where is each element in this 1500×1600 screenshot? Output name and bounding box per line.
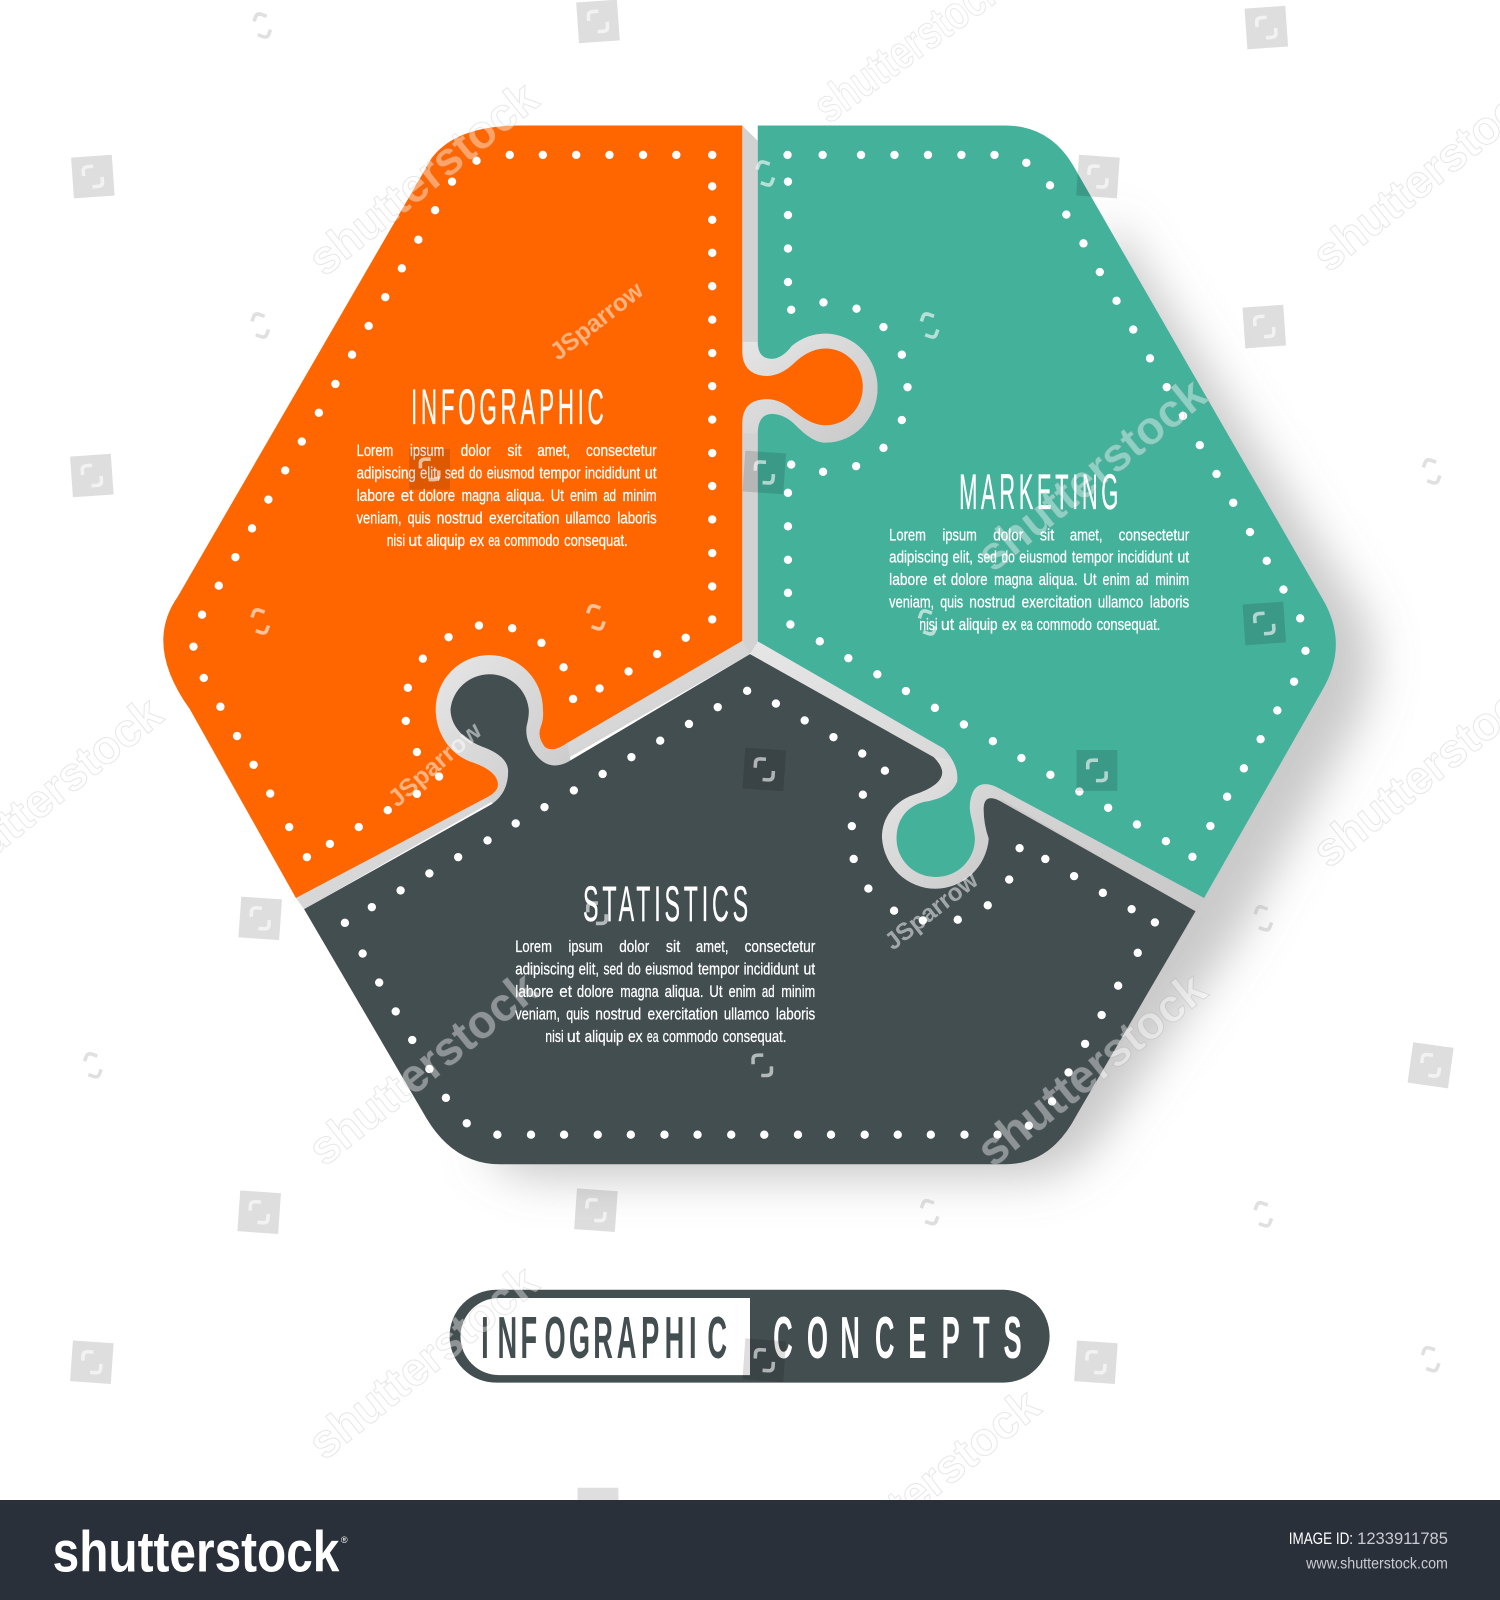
watermark: loose logo marks (81, 13, 1444, 1372)
text block: statistics body: dolor (619, 938, 650, 956)
text block: infographic body: magna (462, 487, 501, 505)
text block: infographic body: elit, (420, 465, 440, 483)
text block: infographic body: incididunt (585, 465, 640, 483)
text block: marketing body: consectetur (1119, 526, 1190, 544)
text block: marketing body: incididunt (1118, 549, 1173, 567)
text block: statistics body: veniam, (515, 1005, 560, 1023)
text block: marketing body: exercitation (1022, 594, 1092, 612)
text block: statistics body: ullamco (724, 1005, 769, 1023)
text block: infographic body: consequat. (564, 532, 628, 550)
text block: marketing body: nisi (919, 616, 938, 634)
watermark: shutterstock diagonal texts: shutterstock (800, 1378, 1050, 1592)
dotted stitching: teal (788, 155, 1306, 857)
text block: infographic body: dolor (461, 442, 491, 460)
watermark: shutterstock diagonal texts: shutterstock (298, 1254, 548, 1469)
text: INFOGRAPHIC (411, 379, 607, 435)
dotted stitching: orange (193, 155, 712, 857)
text block: statistics body: labore (515, 983, 553, 1001)
text block: marketing body: ipsum (943, 526, 977, 544)
text block: infographic body: nostrud (437, 509, 483, 527)
text block: statistics body: sit (666, 938, 681, 956)
text block: infographic body: enim (570, 487, 597, 505)
text block: infographic body: aliquip (426, 532, 465, 550)
text block: infographic body: nisi (387, 532, 405, 550)
watermark: shutterstock diagonal texts: shutterstock (967, 367, 1216, 581)
text: STATISTICS (583, 876, 752, 932)
text block: statistics body: adipiscing (515, 960, 574, 978)
text block: infographic body: Lorem (357, 442, 393, 460)
text block: infographic body: ut (645, 465, 657, 483)
puzzle gaps (296, 126, 1204, 911)
text block: marketing body: quis (940, 594, 963, 612)
text block: marketing body: tempor (1072, 549, 1114, 567)
text block: infographic body: laboris (617, 509, 657, 527)
text block: marketing body: et (933, 571, 946, 589)
text block: statistics body: Lorem (515, 938, 552, 956)
text block: infographic body: ad (603, 487, 616, 505)
text block: infographic body: ex (469, 532, 484, 550)
text block: statistics body: nisi (545, 1028, 564, 1046)
watermark: JSparrow credits (383, 276, 984, 956)
text block: infographic body: dolore (418, 487, 455, 505)
text block: marketing body: laboris (1150, 594, 1189, 612)
text block: marketing body: enim (1103, 571, 1130, 589)
text block: marketing body: do (1002, 549, 1015, 567)
text block: statistics body: consectetur (745, 938, 816, 956)
text block: marketing body (889, 526, 1190, 634)
text block: marketing body: ullamco (1098, 594, 1143, 612)
text block: marketing body: dolore (951, 571, 988, 589)
text block: marketing body: labore (889, 571, 927, 589)
text block: infographic body: sit (507, 442, 522, 460)
text block: infographic body: labore (357, 487, 395, 505)
text block: infographic body: ipsum (410, 442, 444, 460)
text block: infographic body: ut (408, 532, 422, 550)
text block: infographic body (357, 442, 657, 550)
text block: infographic body: veniam, (357, 509, 402, 527)
long drop shadow (480, 219, 1372, 1179)
text block: marketing body: aliquip (959, 616, 998, 634)
text block: marketing body: eiusmod (1019, 549, 1067, 567)
text block: marketing body: sed (977, 549, 997, 567)
text block: infographic body: exercitation (489, 509, 559, 527)
text block: marketing body: elit, (953, 549, 973, 567)
text block: marketing body: ea (1021, 616, 1033, 634)
text block: infographic body: commodo (504, 532, 559, 550)
text block: statistics body: dolore (577, 983, 614, 1001)
text block: statistics body: enim (729, 983, 756, 1001)
text block: infographic body: aliqua. (506, 487, 545, 505)
bottom pill: infographic concepts (450, 1290, 1050, 1383)
text block: marketing body: adipiscing (889, 549, 948, 567)
text block: statistics body: consequat. (723, 1028, 786, 1046)
text block: marketing body: veniam, (889, 594, 934, 612)
footer bar: shutterstock (53, 1520, 340, 1584)
watermark: JSparrow credits: JSparrow (880, 866, 984, 956)
panel: teal marketing piece (758, 126, 1336, 898)
text block: statistics body: aliqua. (665, 983, 704, 1001)
dotted stitching: dark (345, 691, 1155, 1135)
watermark: shutterstock diagonal texts: shutterstock (967, 962, 1216, 1176)
text block: infographic body: ullamco (565, 509, 611, 527)
text block: statistics body: eiusmod (645, 960, 693, 978)
text block: marketing body: nostrud (969, 594, 1015, 612)
text block: statistics body: ad (762, 983, 775, 1001)
text block: infographic body: tempor (539, 465, 581, 483)
watermark: shutterstock diagonal texts: shutterstock (298, 71, 548, 285)
text block: marketing body: Lorem (889, 526, 926, 544)
text block: statistics body: et (559, 983, 572, 1001)
text block: statistics body: exercitation (648, 1005, 718, 1023)
bottom pill: infographic concepts: CONCEPTS (773, 1304, 1022, 1371)
text block: statistics body: tempor (698, 960, 740, 978)
text block: statistics body: sed (603, 960, 623, 978)
footer bar (0, 1500, 1500, 1600)
text block: statistics body: elit, (579, 960, 599, 978)
watermark: JSparrow credits: JSparrow (545, 276, 649, 366)
text block: marketing body: ad (1136, 571, 1149, 589)
text block: infographic body: Ut (551, 487, 564, 505)
text block: marketing body: ut (1177, 549, 1190, 567)
text block: statistics body: commodo (663, 1028, 718, 1046)
text block: statistics body: minim (781, 983, 815, 1001)
text block: marketing body: commodo (1037, 616, 1092, 634)
text block: infographic body: et (401, 487, 414, 505)
text block: marketing body: consequat. (1097, 616, 1160, 634)
text block: marketing body: magna (994, 571, 1033, 589)
text block: infographic body: do (469, 465, 482, 483)
text block: infographic body: ea (488, 532, 501, 550)
text block: statistics body: ut (567, 1028, 581, 1046)
text block: statistics body: ea (647, 1028, 659, 1046)
text block: statistics body: ipsum (569, 938, 603, 956)
text block: statistics body (515, 938, 816, 1046)
footer bar: www.shutterstock.com (1305, 1555, 1448, 1572)
text block: infographic body: eiusmod (487, 465, 534, 483)
text block: statistics body: quis (566, 1005, 589, 1023)
text block: marketing body: ex (1002, 616, 1017, 634)
text block: statistics body: laboris (776, 1005, 815, 1023)
text: MARKETING (959, 464, 1122, 520)
footer bar: 1233911785 (1357, 1530, 1448, 1548)
text block: infographic body: adipiscing (357, 465, 416, 483)
panel: orange infographic piece (163, 126, 863, 898)
text block: marketing body: sit (1040, 526, 1055, 544)
text block: statistics body: Ut (709, 983, 723, 1001)
text block: statistics body: magna (620, 983, 659, 1001)
text block: marketing body: Ut (1083, 571, 1097, 589)
text block: statistics body: ut (803, 960, 816, 978)
footer bar: ® (341, 1535, 348, 1545)
text block: statistics body: amet, (696, 938, 729, 956)
panel: dark statistics piece (304, 654, 1196, 1164)
text block: marketing body: ut (941, 616, 955, 634)
text block: marketing body: minim (1155, 571, 1189, 589)
text block: marketing body: aliqua. (1039, 571, 1078, 589)
watermark: JSparrow credits: JSparrow (383, 717, 488, 813)
text block: infographic body: sed (445, 465, 464, 483)
footer bar: IMAGE ID: (1289, 1530, 1353, 1548)
text block: statistics body: incididunt (744, 960, 799, 978)
watermark: shutterstock diagonal texts: shutterstock (298, 960, 548, 1175)
text block: infographic body: amet, (537, 442, 570, 460)
text block: marketing body: amet, (1070, 526, 1103, 544)
text block: infographic body: quis (408, 509, 431, 527)
bottom pill: infographic concepts: INFOGRAPHIC (481, 1304, 727, 1371)
text block: infographic body: minim (623, 487, 657, 505)
text block: infographic body: consectetur (586, 442, 657, 460)
text block: statistics body: nostrud (595, 1005, 641, 1023)
text block: statistics body: ex (628, 1028, 643, 1046)
text block: marketing body: dolor (993, 526, 1024, 544)
text block: statistics body: aliquip (585, 1028, 624, 1046)
text block: statistics body: do (628, 960, 641, 978)
